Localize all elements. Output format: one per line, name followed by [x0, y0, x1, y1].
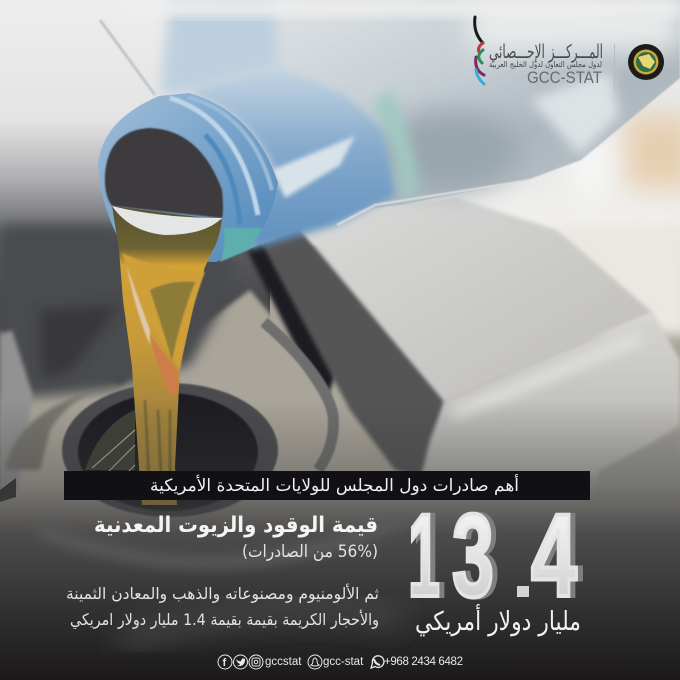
title text: أهم صادرات دول المجلس للولايات المتحدة الأمريكية: [150, 474, 519, 496]
footer social links: [218, 655, 463, 669]
unit label: مليار دولار أمريكي: [415, 603, 581, 637]
big number: [408, 490, 582, 622]
handle: gcc-stat: gcc-stat: [323, 656, 364, 668]
logo latin name: GCC-STAT: [527, 68, 602, 87]
icon: facebook: f: [222, 657, 226, 669]
engine surface: [0, 225, 400, 620]
digit shadows: 3: [457, 490, 499, 622]
paragraph line 1: ثم الألومنيوم ومصنوعاته والذهب والمعادن الثمينة: [66, 583, 379, 604]
logo arabic subtitle: لدول مجلس التعاون لدول الخليج العربية: [489, 60, 602, 69]
bottle body: [120, 0, 680, 250]
title bar: [64, 471, 590, 500]
share of exports: (56% من الصادرات): [242, 542, 378, 562]
engine cover: [247, 198, 680, 500]
lower dark shading: [0, 400, 680, 680]
icon: snapchat: [308, 655, 322, 669]
big number: 1: [408, 490, 440, 622]
icon: ribbon: [475, 17, 484, 84]
text block: fuel exports: [66, 513, 379, 630]
poured oil stream: [112, 206, 222, 505]
oil filler opening: [62, 383, 278, 517]
icon: instagram: [249, 655, 263, 669]
icon: whatsapp: [371, 656, 384, 668]
icon: facebook: [218, 655, 232, 669]
logo arabic name: المـــركـــز الإحـــصائي: [489, 41, 603, 63]
heading: قيمة الوقود والزيوت المعدنية: [94, 513, 378, 538]
paragraph line 2: والأحجار الكريمة بقيمة بقيمة 1.4 مليار دولار امريكي: [70, 609, 379, 630]
digit shadows: 4: [536, 490, 582, 622]
digit shadows: 1: [413, 490, 445, 622]
phone number: +968 2434 6482: [384, 656, 463, 668]
bottle neck with threads: [98, 93, 278, 262]
icon: twitter: [234, 655, 248, 669]
handle: gccstat: gccstat: [265, 656, 302, 668]
decimal point: [517, 586, 529, 597]
logo: GCC-STAT: [475, 17, 664, 90]
hose curve: [264, 322, 333, 470]
digit 4: 4: [531, 490, 577, 622]
digit 3: 3: [452, 490, 494, 622]
digit shadows: [413, 490, 582, 622]
icon: GCC emblem: [628, 44, 664, 80]
bottle opening: [105, 128, 223, 218]
